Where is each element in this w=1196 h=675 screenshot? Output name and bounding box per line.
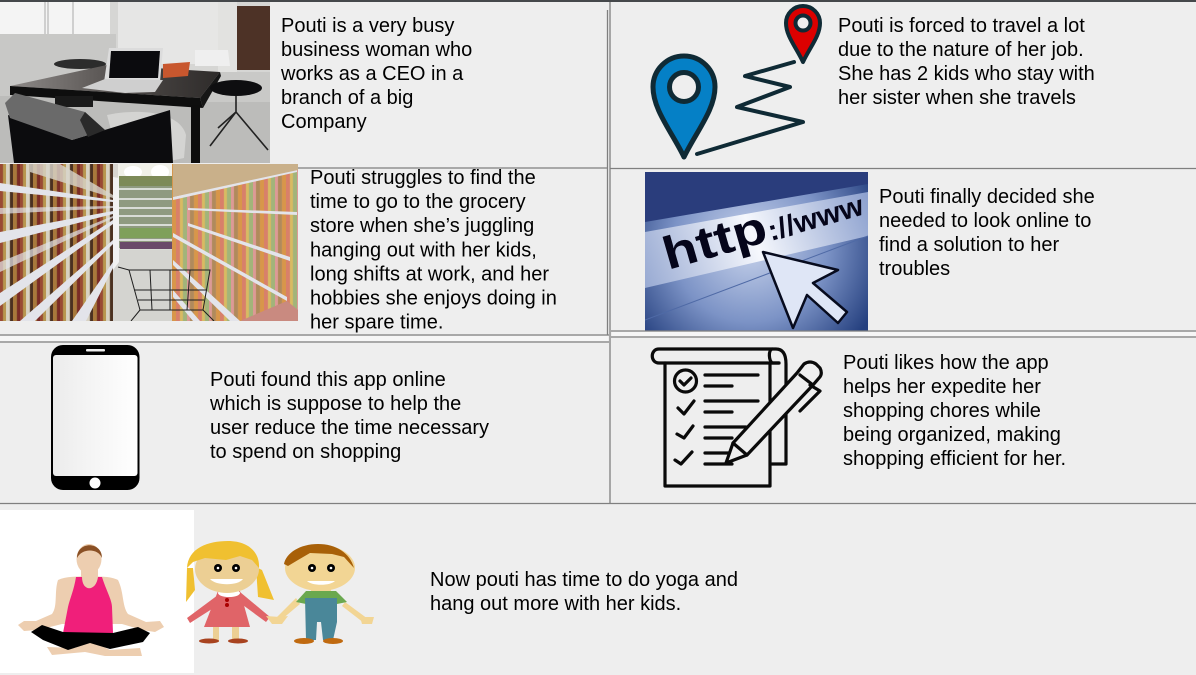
text: looking online: needed to look online to <box>879 210 1091 232</box>
text: likes the app: shopping chores while <box>843 400 1041 422</box>
panel: travel <box>653 6 1095 157</box>
text: grocery struggle: long shifts at work, and her <box>310 263 549 285</box>
panel: found the app <box>51 345 489 490</box>
photo: office desk with laptop <box>0 2 270 163</box>
text: likes the app: shopping efficient for her. <box>843 448 1066 470</box>
panel: grocery struggle <box>0 164 557 334</box>
text: grocery struggle: time to go to the grocery <box>310 191 526 213</box>
icon: map pins and route <box>653 6 820 157</box>
panel: busy business woman <box>0 2 472 163</box>
text: intro: branch of a big <box>281 87 413 109</box>
text: yoga and kids: hang out more with her kids. <box>430 593 681 615</box>
text: yoga and kids: Now pouti has time to do yoga and <box>430 569 738 591</box>
text: looking online: Pouti finally decided she <box>879 186 1095 208</box>
text: travel: She has 2 kids who stay with <box>838 63 1095 85</box>
text: grocery struggle: Pouti struggles to find the <box>310 167 536 189</box>
text: found the app: user reduce the time necessary <box>210 417 489 439</box>
text: looking online: find a solution to her <box>879 234 1059 256</box>
photo: supermarket aisle with cart <box>0 164 298 321</box>
photo: browser address bar with cursor: http <box>656 200 773 280</box>
text: intro: Pouti is a very busy <box>281 15 454 37</box>
text: likes the app: Pouti likes how the app <box>843 352 1049 374</box>
text: grocery struggle: store when she’s juggling <box>310 215 534 237</box>
text: intro: Company <box>281 111 367 133</box>
panel: likes the app <box>652 349 1066 486</box>
text: travel: due to the nature of her job. <box>838 39 1084 61</box>
text: found the app: Pouti found this app online <box>210 369 446 391</box>
panel: looking online <box>645 172 1095 331</box>
text: grocery struggle: hanging out with her kids, <box>310 239 537 261</box>
text: found the app: which is suppose to help the <box>209 393 461 415</box>
text: grocery struggle: hobbies she enjoys doing in <box>310 288 557 310</box>
text: found the app: to spend on shopping <box>210 441 401 463</box>
text: likes the app: helps her expedite her <box>843 376 1041 398</box>
photo: browser address bar with cursor <box>645 172 868 331</box>
illustration: woman doing yoga <box>0 510 194 673</box>
text: intro: business woman who <box>281 39 472 61</box>
illustration: girl and boy holding hands <box>186 541 374 644</box>
text: travel: Pouti is forced to travel a lot <box>838 15 1085 37</box>
text: intro: works as a CEO in a <box>280 63 464 85</box>
icon: smartphone <box>51 345 140 490</box>
panel: yoga and kids <box>0 510 738 673</box>
text: likes the app: being organized, making <box>843 424 1061 446</box>
photo: browser address bar with cursor: ://www <box>764 190 868 248</box>
text: looking online: troubles <box>879 258 950 280</box>
icon: checklist and pen <box>652 349 821 486</box>
text: travel: her sister when she travels <box>838 87 1076 109</box>
text: grocery struggle: her spare time. <box>310 312 443 334</box>
